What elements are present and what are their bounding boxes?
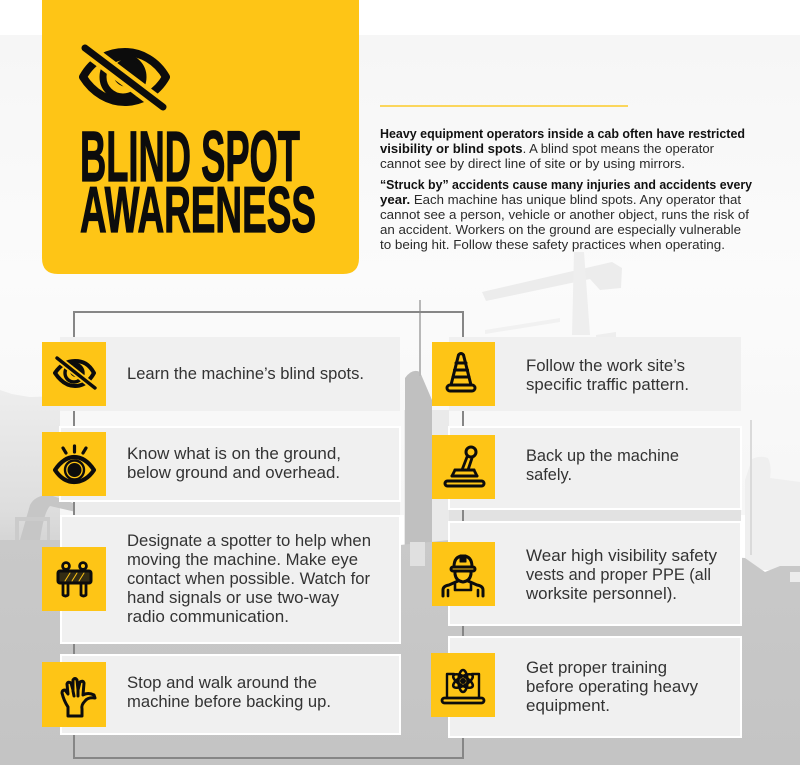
card: back up safely — [432, 427, 741, 509]
intro text — [380, 127, 752, 252]
text: Designate a spotter to help when — [127, 532, 371, 550]
construction site silhouette — [0, 252, 800, 765]
intro text: to being hit. Follow these safety practices when operating. — [380, 238, 725, 252]
intro text: year. Each machine has unique blind spots. Any operator that — [380, 193, 742, 207]
text: machine before backing up. — [127, 693, 331, 711]
icon: eye with lashes — [55, 446, 94, 482]
text: radio communication. — [127, 608, 289, 626]
icon: raised hand — [62, 678, 95, 716]
title — [80, 118, 316, 246]
text — [526, 357, 689, 394]
connecting frame — [74, 312, 463, 758]
title: BLIND SPOT — [80, 118, 300, 197]
title: AWARENESS — [80, 173, 316, 246]
card: designate a spotter — [42, 516, 400, 643]
tower crane — [482, 252, 622, 337]
text: Know what is on the ground, — [127, 445, 341, 463]
text: Stop and walk around the — [127, 674, 317, 692]
text: safely. — [526, 466, 572, 484]
text: before operating heavy — [526, 678, 699, 696]
icon: laptop with atom — [442, 670, 484, 703]
text — [526, 659, 699, 715]
text: equipment. — [526, 697, 610, 715]
text: moving the machine. Make eye — [127, 551, 358, 569]
icon: crossed-out eye small — [55, 358, 95, 388]
card: proper training — [431, 637, 741, 737]
text: vests and proper PPE (all — [526, 566, 711, 584]
text: below ground and overhead. — [127, 464, 340, 482]
card: safety vests and PPE — [432, 522, 741, 625]
icon: control lever — [445, 447, 484, 486]
intro text: visibility or blind spots . A blind spot means the operator — [380, 142, 714, 156]
text: Follow the work site’s — [526, 357, 685, 375]
icon: worker in hard hat — [443, 555, 483, 596]
text: Learn the machine’s blind spots. — [127, 365, 364, 383]
text: Back up the machine — [526, 447, 679, 465]
text: hand signals or use two-way — [127, 589, 340, 607]
text: contact when possible. Watch for — [127, 570, 371, 588]
text: Wear high visibility safety — [526, 547, 718, 565]
icon: crossed-out eye — [83, 48, 166, 107]
card: learn blind spots — [42, 337, 400, 411]
divider rule — [380, 105, 628, 107]
text — [127, 445, 341, 482]
text — [526, 447, 679, 484]
card: stop and walk around — [42, 655, 400, 734]
text: specific traffic pattern. — [526, 376, 689, 394]
text — [127, 532, 371, 626]
icon: road barrier — [58, 563, 91, 596]
icon: traffic cone — [447, 354, 475, 391]
text: Get proper training — [526, 659, 667, 677]
intro text: cannot see by direct line of site or by using mirrors. — [380, 157, 685, 171]
intro text: cannot see a person, vehicle or another object, runs the risk of — [380, 208, 750, 222]
card: traffic pattern — [432, 337, 741, 411]
header panel — [42, 0, 359, 274]
card: know what is around — [42, 427, 400, 501]
text — [525, 547, 718, 603]
text: worksite personnel). — [525, 585, 677, 603]
text — [127, 674, 331, 711]
intro text: an accident. Workers on the ground are especially vulnerable — [380, 223, 741, 237]
intro text: “Struck by” accidents cause many injuries and accidents every — [380, 178, 752, 192]
intro text: Heavy equipment operators inside a cab often have restricted — [380, 127, 745, 141]
